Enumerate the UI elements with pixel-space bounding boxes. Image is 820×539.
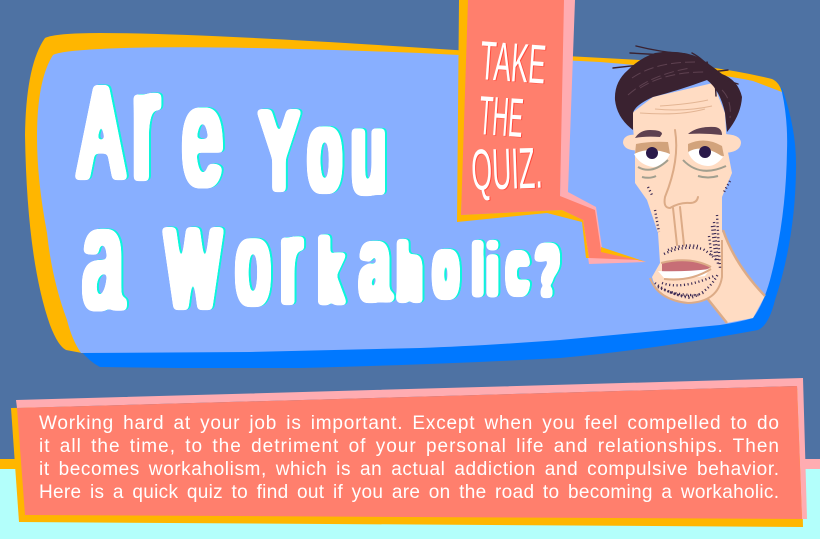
title: Are You a Workaholic?: W <box>166 206 220 333</box>
title: Are You a Workaholic?: i <box>489 230 497 311</box>
intro paragraph: it becomes workaholism, which is an actual addiction and compulsive behavior. <box>39 459 779 480</box>
callout: take the quiz: QUIZ. <box>470 135 544 203</box>
intro paragraph: it all the time, to the detriment of your personal life and relationships. Then <box>39 436 779 457</box>
eyelids <box>635 140 724 156</box>
title: Are You a Workaholic?: o <box>236 198 269 329</box>
panel: title speech bubble <box>25 33 796 368</box>
teeth <box>658 269 710 278</box>
stubble <box>648 181 730 298</box>
title: Are You a Workaholic?: c <box>508 224 527 312</box>
callout: take the quiz: TAKE <box>478 30 548 96</box>
title: Are You a Workaholic? <box>79 39 557 338</box>
under-eye bags <box>638 160 726 178</box>
intro paragraph: Here is a quick quiz to find out if you are on the road to becoming a workaholic. <box>39 482 779 503</box>
title: Are You a Workaholic?: A <box>79 60 123 207</box>
lips and chin outline <box>650 240 722 303</box>
callout: take the quiz <box>457 0 646 264</box>
title: Are You a Workaholic?: a <box>83 179 123 338</box>
nose <box>665 130 698 245</box>
head <box>632 83 732 303</box>
illustration: tired man's face <box>613 46 765 323</box>
title: Are You a Workaholic?: h <box>398 226 421 319</box>
title: Are You a Workaholic?: o <box>308 87 341 216</box>
title: Are You a Workaholic?: l <box>474 230 482 311</box>
forehead wrinkles <box>640 100 712 114</box>
neck <box>700 230 765 323</box>
title: Are You a Workaholic?: ? <box>537 231 557 312</box>
eyebrows <box>635 127 722 138</box>
title: Are You a Workaholic?: r <box>132 39 158 213</box>
title: Are You a Workaholic?: u <box>352 87 385 218</box>
title: Are You a Workaholic?: e <box>183 60 222 215</box>
title: Are You a Workaholic?: o <box>434 221 458 316</box>
hair strands <box>613 46 738 96</box>
eyes <box>634 148 723 167</box>
mouth <box>662 260 711 274</box>
title: Are You a Workaholic?: Y <box>260 88 298 215</box>
ears <box>623 134 741 153</box>
title: Are You a Workaholic?: r <box>281 195 301 330</box>
title: Are You a Workaholic?: k <box>319 221 342 323</box>
callout: take the quiz: THE <box>477 84 525 149</box>
title: Are You a Workaholic?: a <box>360 204 390 323</box>
intro paragraph <box>39 413 779 503</box>
hair <box>615 52 742 132</box>
panel: intro text <box>11 378 807 527</box>
intro paragraph: Working hard at your job is important. Except when you feel compelled to do <box>39 413 779 434</box>
